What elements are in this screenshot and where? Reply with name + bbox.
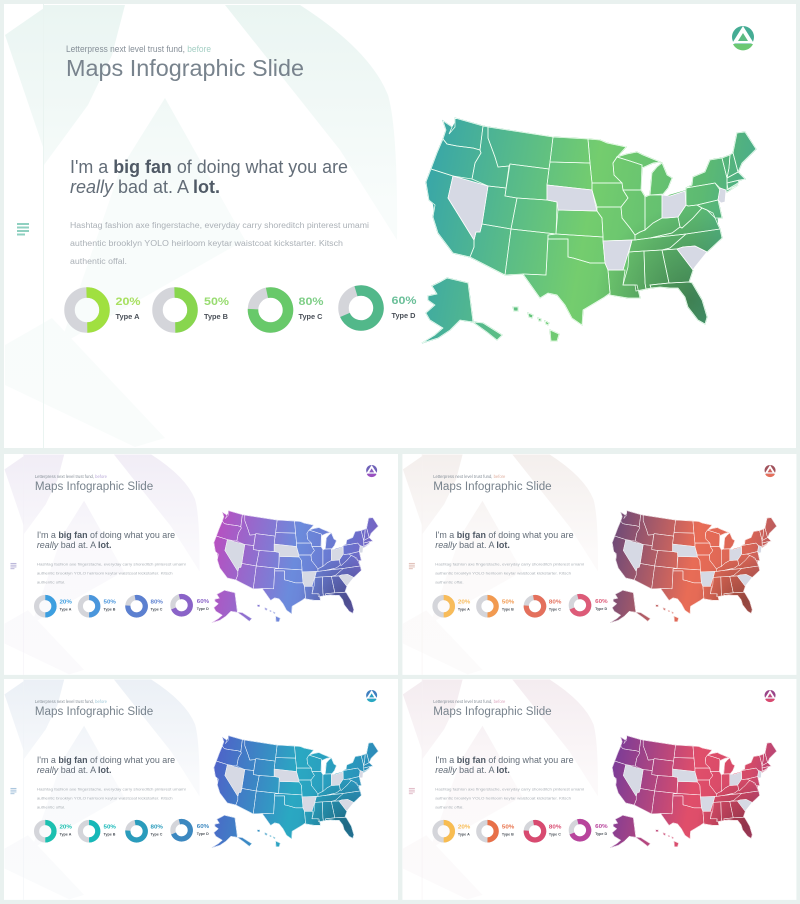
- label: Type C: [151, 825, 163, 837]
- label: Type B: Type B: [502, 608, 514, 612]
- US map: [422, 118, 756, 343]
- label: Type C: Type C: [151, 833, 163, 837]
- panel: magenta slide: [402, 679, 796, 900]
- donut: Type C: [525, 821, 545, 841]
- body text: authentic offal.: [435, 579, 464, 584]
- heading: really bad at. A lot.: [435, 765, 510, 775]
- US map: [212, 736, 378, 848]
- label: Type B: Type B: [104, 608, 116, 612]
- label: Type C: [151, 600, 163, 612]
- label: Type A: 20%: [116, 296, 141, 308]
- label: Type A: 20%: [59, 825, 72, 831]
- icon: side menu: [17, 223, 29, 236]
- body text: [37, 561, 186, 584]
- label: Type D: [197, 599, 209, 611]
- donut: Type B: [479, 823, 496, 840]
- body text: Hashtag fashion axe fingerstache, everyday carry shoreditch pinterest umami: [435, 786, 584, 791]
- label: Type C: 80%: [151, 825, 163, 831]
- body text: authentic brooklyn YOLO heirloom keytar waistcoat kickstarter. Kitsch: [37, 795, 173, 800]
- label: Type A: Type A: [458, 833, 470, 837]
- label: Type A: Type A: [59, 608, 72, 612]
- icon: side menu: [10, 563, 16, 569]
- label: Type B: [104, 600, 116, 612]
- body text: authentic offal.: [70, 257, 127, 266]
- title: Maps Infographic Slide: [433, 705, 552, 718]
- body text: authentic offal.: [435, 804, 464, 809]
- label: Type B: [204, 296, 229, 321]
- title: Maps Infographic Slide: [433, 480, 552, 493]
- label: Type D: 60%: [197, 824, 209, 830]
- label: Type A: 20%: [458, 600, 470, 606]
- label: Type B: Type B: [204, 312, 229, 321]
- body text: authentic brooklyn YOLO heirloom keytar waistcoat kickstarter. Kitsch: [435, 570, 571, 575]
- heading: really bad at. A lot.: [37, 540, 111, 550]
- label: Type C: 80%: [549, 600, 561, 606]
- icon: logo: [732, 26, 754, 50]
- donut: Type C: [525, 596, 545, 616]
- heading: I'm a big fan of doing what you are: [70, 156, 348, 177]
- label: Type B: Type B: [502, 833, 514, 837]
- label: Type D: [392, 295, 417, 320]
- label: Type D: [595, 824, 608, 836]
- donut: Type A: [37, 598, 54, 615]
- label: Type D: [595, 599, 608, 611]
- donut: Type C: [250, 290, 291, 330]
- label: Type D: Type D: [595, 832, 607, 836]
- body text: Hashtag fashion axe fingerstache, everyday carry shoreditch pinterest umami: [37, 786, 186, 791]
- label: Type B: 50%: [502, 600, 514, 606]
- label: Type C: Type C: [151, 608, 163, 612]
- heading: [435, 755, 574, 775]
- label: Type B: 50%: [502, 825, 514, 831]
- heading: [37, 755, 175, 775]
- label: Type B: [502, 825, 514, 837]
- US map: [610, 511, 777, 623]
- donut: Type A: [70, 292, 104, 328]
- body text: [37, 786, 186, 809]
- icon: logo: [366, 690, 377, 702]
- subtitle: Letterpress next level trust fund, before: [66, 44, 211, 54]
- label: Type C: 80%: [151, 600, 163, 606]
- heading: [70, 156, 348, 197]
- panel: blue slide: [4, 679, 398, 900]
- heading: I'm a big fan of doing what you are: [435, 530, 574, 540]
- icon: side menu: [409, 788, 415, 794]
- heading: I'm a big fan of doing what you are: [37, 530, 175, 540]
- donut: Type D: [171, 595, 192, 616]
- body text: authentic offal.: [37, 804, 65, 809]
- heading: really bad at. A lot.: [435, 540, 510, 550]
- donut: Type B: [158, 292, 192, 328]
- label: Type D: 60%: [595, 599, 608, 605]
- label: Type B: 50%: [104, 825, 116, 831]
- donut: Type A: [435, 598, 452, 615]
- label: Type A: Type A: [116, 312, 140, 321]
- subtitle: Letterpress next level trust fund, before: [35, 474, 107, 479]
- panel: purple slide: [4, 454, 398, 675]
- label: Type D: Type D: [392, 311, 416, 320]
- label: Type B: [104, 825, 116, 837]
- body text: Hashtag fashion axe fingerstache, everyday carry shoreditch pinterest umami: [37, 561, 186, 566]
- label: Type B: 50%: [204, 296, 229, 308]
- subtitle: Letterpress next level trust fund, before: [433, 474, 506, 479]
- label: Type A: 20%: [59, 600, 72, 606]
- label: Type A: [116, 296, 141, 321]
- donut: Type B: [479, 598, 496, 615]
- label: Type C: [549, 825, 561, 837]
- donut: Type C: [126, 821, 147, 841]
- body text: [70, 221, 369, 266]
- icon: logo: [765, 690, 776, 702]
- label: Type D: Type D: [197, 832, 209, 836]
- label: Type C: Type C: [549, 608, 561, 612]
- label: Type A: [458, 825, 470, 837]
- title: Maps Infographic Slide: [35, 480, 153, 493]
- donut: Type D: [340, 287, 382, 329]
- body text: Hashtag fashion axe fingerstache, everyday carry shoreditch pinterest umami: [70, 221, 369, 230]
- label: Type C: [549, 600, 561, 612]
- icon: side menu: [10, 788, 16, 794]
- donut: Type A: [37, 823, 54, 840]
- body text: [435, 561, 584, 584]
- subtitle: Letterpress next level trust fund, before: [35, 699, 107, 704]
- body text: Hashtag fashion axe fingerstache, everyday carry shoreditch pinterest umami: [435, 561, 584, 566]
- label: Type B: Type B: [104, 833, 116, 837]
- donut: Type D: [569, 595, 591, 616]
- donut: Type C: [126, 596, 147, 616]
- subtitle: Letterpress next level trust fund, before: [433, 699, 506, 704]
- icon: side menu: [409, 563, 415, 569]
- label: Type D: Type D: [595, 607, 607, 611]
- body text: authentic brooklyn YOLO heirloom keytar waistcoat kickstarter. Kitsch: [435, 795, 571, 800]
- body text: authentic brooklyn YOLO heirloom keytar waistcoat kickstarter. Kitsch: [70, 239, 343, 248]
- label: Type A: 20%: [458, 825, 470, 831]
- label: Type A: [458, 600, 470, 612]
- panel: orange slide: [402, 454, 796, 675]
- label: Type D: 60%: [595, 824, 608, 830]
- donut: Type B: [80, 598, 98, 615]
- heading: really bad at. A lot.: [37, 765, 111, 775]
- donut: Type D: [171, 820, 192, 841]
- label: Type A: Type A: [59, 833, 72, 837]
- icon: logo: [366, 465, 377, 477]
- body text: authentic offal.: [37, 579, 65, 584]
- donut: Type D: [569, 820, 591, 841]
- heading: really bad at. A lot.: [70, 176, 220, 197]
- label: Type D: [197, 824, 209, 836]
- heading: I'm a big fan of doing what you are: [37, 755, 175, 765]
- US map: [212, 511, 378, 623]
- label: Type A: [59, 600, 72, 612]
- heading: [37, 530, 175, 550]
- heading: I'm a big fan of doing what you are: [435, 755, 574, 765]
- icon: logo: [765, 465, 776, 477]
- US map: [610, 736, 777, 848]
- donut: Type B: [80, 823, 98, 840]
- label: Type C: Type C: [549, 833, 561, 837]
- panel: green slide: [4, 4, 796, 448]
- label: Type B: 50%: [104, 600, 116, 606]
- label: Type D: Type D: [197, 607, 209, 611]
- title: Maps Infographic Slide: [66, 55, 304, 81]
- body text: [435, 786, 584, 809]
- label: Type D: 60%: [392, 295, 417, 307]
- label: Type D: 60%: [197, 599, 209, 605]
- title: Maps Infographic Slide: [35, 705, 153, 718]
- label: Type A: [59, 825, 72, 837]
- label: Type C: Type C: [298, 312, 323, 321]
- label: Type C: [298, 296, 324, 321]
- label: Type C: 80%: [298, 296, 324, 308]
- label: Type A: Type A: [458, 608, 470, 612]
- body text: authentic brooklyn YOLO heirloom keytar waistcoat kickstarter. Kitsch: [37, 570, 173, 575]
- heading: [435, 530, 574, 550]
- donut: Type A: [435, 823, 452, 840]
- label: Type B: [502, 600, 514, 612]
- label: Type C: 80%: [549, 825, 561, 831]
